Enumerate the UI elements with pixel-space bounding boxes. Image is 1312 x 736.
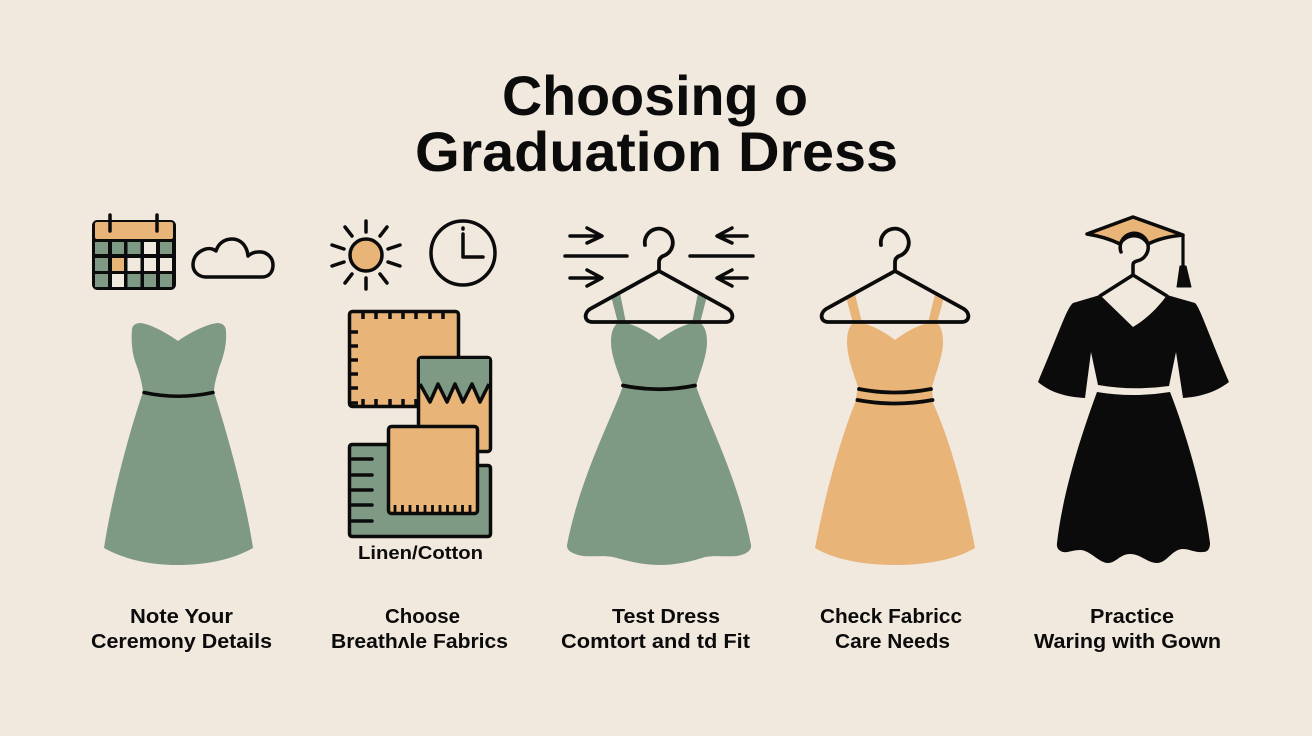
icon: hanger <box>586 229 732 322</box>
dress: orange on hanger <box>815 294 975 565</box>
dress: black gown on hanger <box>1038 295 1229 563</box>
title: Graduation Dress <box>415 120 898 183</box>
dress: green strapless <box>104 323 253 565</box>
label: check fabric care needs <box>820 605 962 653</box>
label: note your ceremony details: Ceremony Details <box>91 630 272 653</box>
panel: test dress comfort and fit <box>561 228 753 653</box>
icon: graduation cap <box>1087 217 1191 287</box>
label: test dress comfort and fit <box>561 605 750 653</box>
panel: practice wearing with gown <box>1034 217 1229 653</box>
panel: choose breathable fabrics <box>331 221 508 653</box>
icon: fabric swatches <box>349 311 490 536</box>
label: practice wearing with gown: Practice <box>1090 605 1174 628</box>
label: test dress comfort and fit: Comtort and td Fit <box>561 630 750 653</box>
label: check fabric care needs: Care Needs <box>835 630 950 653</box>
icon: cloud <box>193 239 273 277</box>
label: test dress comfort and fit: Test Dress <box>612 605 720 628</box>
icon: inward arrows left <box>565 228 627 286</box>
label: choose breathable fabrics <box>331 605 508 653</box>
icon: hanger <box>1100 233 1167 296</box>
icon: hanger <box>822 229 968 322</box>
label: choose breathable fabrics: Breathʌle Fabrics <box>331 630 508 653</box>
label: check fabric care needs: Check Fabricc <box>820 605 962 628</box>
label: note your ceremony details <box>91 605 272 653</box>
panel: note ceremony details <box>91 215 273 653</box>
title <box>415 64 898 183</box>
label: practice wearing with gown <box>1034 605 1221 653</box>
panel: check fabric care needs <box>815 229 975 653</box>
icon: clock <box>431 221 495 285</box>
label: linen/cotton: Linen/Cotton <box>358 542 483 563</box>
title: Choosing o <box>502 64 808 127</box>
label: choose breathable fabrics: Choose <box>385 605 460 628</box>
icon: sun <box>332 221 400 289</box>
icon: inward arrows right <box>690 228 753 286</box>
icon: calendar <box>94 215 174 288</box>
label: note your ceremony details: Note Your <box>130 605 233 628</box>
label: practice wearing with gown: Waring with Gown <box>1034 630 1221 653</box>
dress: green on hanger <box>567 293 751 565</box>
